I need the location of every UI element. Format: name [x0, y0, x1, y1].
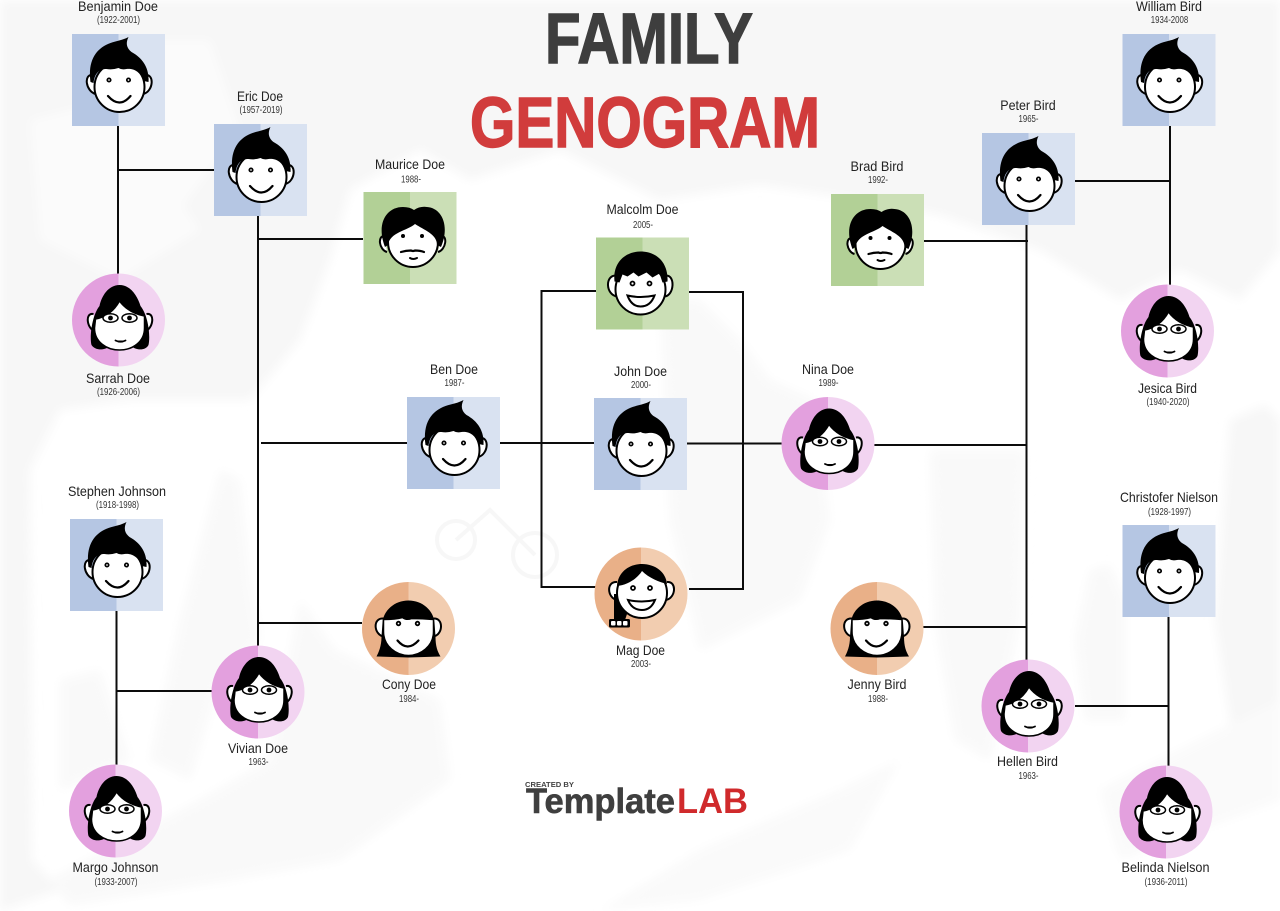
- person: Vivian Doe: [212, 646, 304, 768]
- person: Stephen Johnson: (1918-1998): [96, 500, 139, 511]
- logo word: LAB: LAB: [677, 782, 748, 821]
- person: Nina Doe: Nina Doe: [802, 361, 854, 377]
- person: Brad Bird: [831, 158, 924, 286]
- title line: GENOGRAM: GENOGRAM: [470, 84, 820, 163]
- person: Jenny Bird: [830, 582, 924, 705]
- person: William Bird: [1122, 0, 1216, 126]
- person: Maurice Doe: Maurice Doe: [375, 156, 445, 172]
- connector lines: [116, 126, 1170, 766]
- person: John Doe: 2000-: [631, 380, 651, 391]
- person: Mag Doe: [594, 548, 688, 670]
- person: Malcolm Doe: 2005-: [633, 220, 653, 231]
- person: Malcolm Doe: Malcolm Doe: [606, 201, 679, 217]
- person: Stephen Johnson: [68, 483, 166, 611]
- person: Benjamin Doe: (1922-2001): [97, 15, 140, 26]
- logo: TemplateLAB: [525, 780, 748, 821]
- person: Hellen Bird: 1963-: [1018, 771, 1038, 782]
- person: Brad Bird: Brad Bird: [850, 158, 904, 174]
- person: Jenny Bird: 1988-: [868, 694, 888, 705]
- person: Vivian Doe: 1963-: [248, 757, 268, 768]
- person: Christofer Nielson: Christofer Nielson: [1120, 489, 1218, 505]
- person: Jesica Bird: (1940-2020): [1146, 397, 1190, 408]
- person: Mag Doe: Mag Doe: [616, 642, 665, 658]
- person: William Bird: 1934-2008: [1151, 15, 1189, 26]
- person: John Doe: John Doe: [614, 363, 667, 379]
- person: Ben Doe: [407, 361, 500, 489]
- person: Jenny Bird: Jenny Bird: [848, 676, 906, 692]
- person: Nina Doe: 1989-: [818, 378, 838, 389]
- person: Margo Johnson: [69, 764, 162, 888]
- person: Maurice Doe: 1988-: [401, 174, 421, 186]
- person: Nina Doe: [782, 361, 874, 490]
- person: Jesica Bird: [1121, 284, 1214, 408]
- person: Margo Johnson: (1933-2007): [94, 877, 138, 888]
- person: Cony Doe: [362, 582, 455, 705]
- person: Benjamin Doe: [72, 0, 165, 126]
- title: [470, 0, 820, 163]
- person: Jesica Bird: Jesica Bird: [1138, 380, 1197, 396]
- person: Hellen Bird: [982, 660, 1074, 782]
- logo word: Template: Template: [526, 782, 675, 821]
- person: Eric Doe: Eric Doe: [237, 88, 283, 104]
- person: Brad Bird: 1992-: [868, 175, 888, 186]
- person: Peter Bird: [982, 97, 1075, 225]
- person: Margo Johnson: Margo Johnson: [72, 859, 158, 875]
- person: Christofer Nielson: (1928-1997): [1148, 507, 1191, 518]
- person: Eric Doe: [214, 88, 307, 216]
- person: Ben Doe: Ben Doe: [430, 361, 478, 377]
- person: Belinda Nielson: [1120, 766, 1212, 888]
- title line: FAMILY: FAMILY: [545, 0, 753, 79]
- person: Eric Doe: (1957-2019): [240, 105, 282, 116]
- person: Peter Bird: 1965-: [1018, 114, 1038, 125]
- person: Sarrah Doe: [72, 274, 165, 398]
- person: Cony Doe: 1984-: [399, 694, 419, 705]
- person: Belinda Nielson: (1936-2011): [1144, 877, 1188, 888]
- person: Christofer Nielson: [1120, 489, 1218, 617]
- person: Belinda Nielson: Belinda Nielson: [1122, 859, 1210, 875]
- person: Stephen Johnson: Stephen Johnson: [68, 483, 166, 499]
- person: Peter Bird: Peter Bird: [1000, 97, 1056, 113]
- person: Mag Doe: 2003-: [631, 659, 651, 670]
- person: Vivian Doe: Vivian Doe: [228, 740, 288, 756]
- person: Hellen Bird: Hellen Bird: [997, 753, 1058, 769]
- person: Maurice Doe: [364, 156, 456, 284]
- person: John Doe: [594, 363, 687, 490]
- person: Sarrah Doe: Sarrah Doe: [86, 370, 150, 386]
- person: Malcolm Doe: [596, 201, 689, 330]
- logo caption: CREATED BY: [525, 780, 574, 789]
- person: Ben Doe: 1987-: [444, 378, 464, 389]
- person: Cony Doe: Cony Doe: [382, 676, 436, 692]
- person: Sarrah Doe: (1926-2006): [97, 387, 140, 398]
